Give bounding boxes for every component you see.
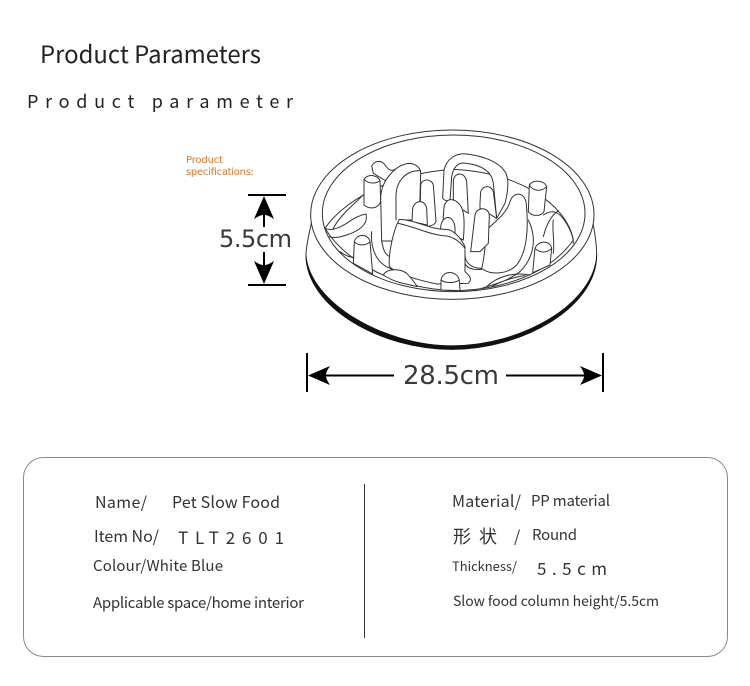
large arch left (381, 163, 421, 257)
width dimension: 28.5cm (403, 361, 499, 391)
center pegs (420, 180, 436, 226)
bowl floor (325, 169, 573, 291)
peg left front (353, 235, 373, 274)
ridges right (482, 211, 573, 288)
right column: Material/ (452, 488, 522, 512)
right column: 形状 (453, 523, 497, 549)
label: product specifications: specifications: (186, 167, 254, 178)
ridges left (325, 193, 395, 270)
icon: slow feeder bowl (306, 130, 597, 349)
right block (482, 194, 527, 273)
right column: Thickness/ (452, 556, 517, 575)
label: product specifications (186, 155, 254, 178)
bowl base shadow (306, 255, 597, 349)
right column: Round (532, 524, 577, 545)
left column: Colour/White Blue (93, 555, 223, 576)
left column: Applicable space/home interior (93, 592, 304, 613)
height dimension (219, 195, 292, 285)
peg back left (372, 161, 395, 183)
large arch right (443, 154, 508, 218)
peg center right (471, 209, 489, 252)
peg right back (528, 181, 547, 215)
width dimension (307, 353, 603, 392)
bowl body (306, 222, 597, 349)
inner rim (322, 135, 585, 292)
center block (389, 219, 470, 284)
left column (93, 489, 304, 613)
peg left (364, 176, 381, 208)
subtitle: Product parameter (27, 88, 294, 114)
ridges center (465, 255, 482, 269)
peg right front (533, 242, 552, 273)
right column (452, 488, 659, 611)
right column: 5.5cm (537, 555, 607, 580)
peg front center (441, 272, 460, 291)
left column: Pet Slow Food (172, 489, 280, 513)
label: product specifications: Product (186, 155, 223, 166)
outer rim (311, 130, 594, 299)
left column: TLT2601 (178, 524, 284, 549)
title: Product Parameters (40, 35, 261, 70)
left column: Item No/ (94, 523, 160, 547)
height dimension: 5.5cm (219, 225, 292, 253)
right column: PP material (531, 490, 610, 511)
right column: / (514, 523, 521, 547)
right column: Slow food column height/5.5cm (453, 591, 659, 611)
mound front (383, 270, 417, 287)
parameters panel (24, 458, 728, 656)
left column: Name/ (95, 489, 148, 513)
